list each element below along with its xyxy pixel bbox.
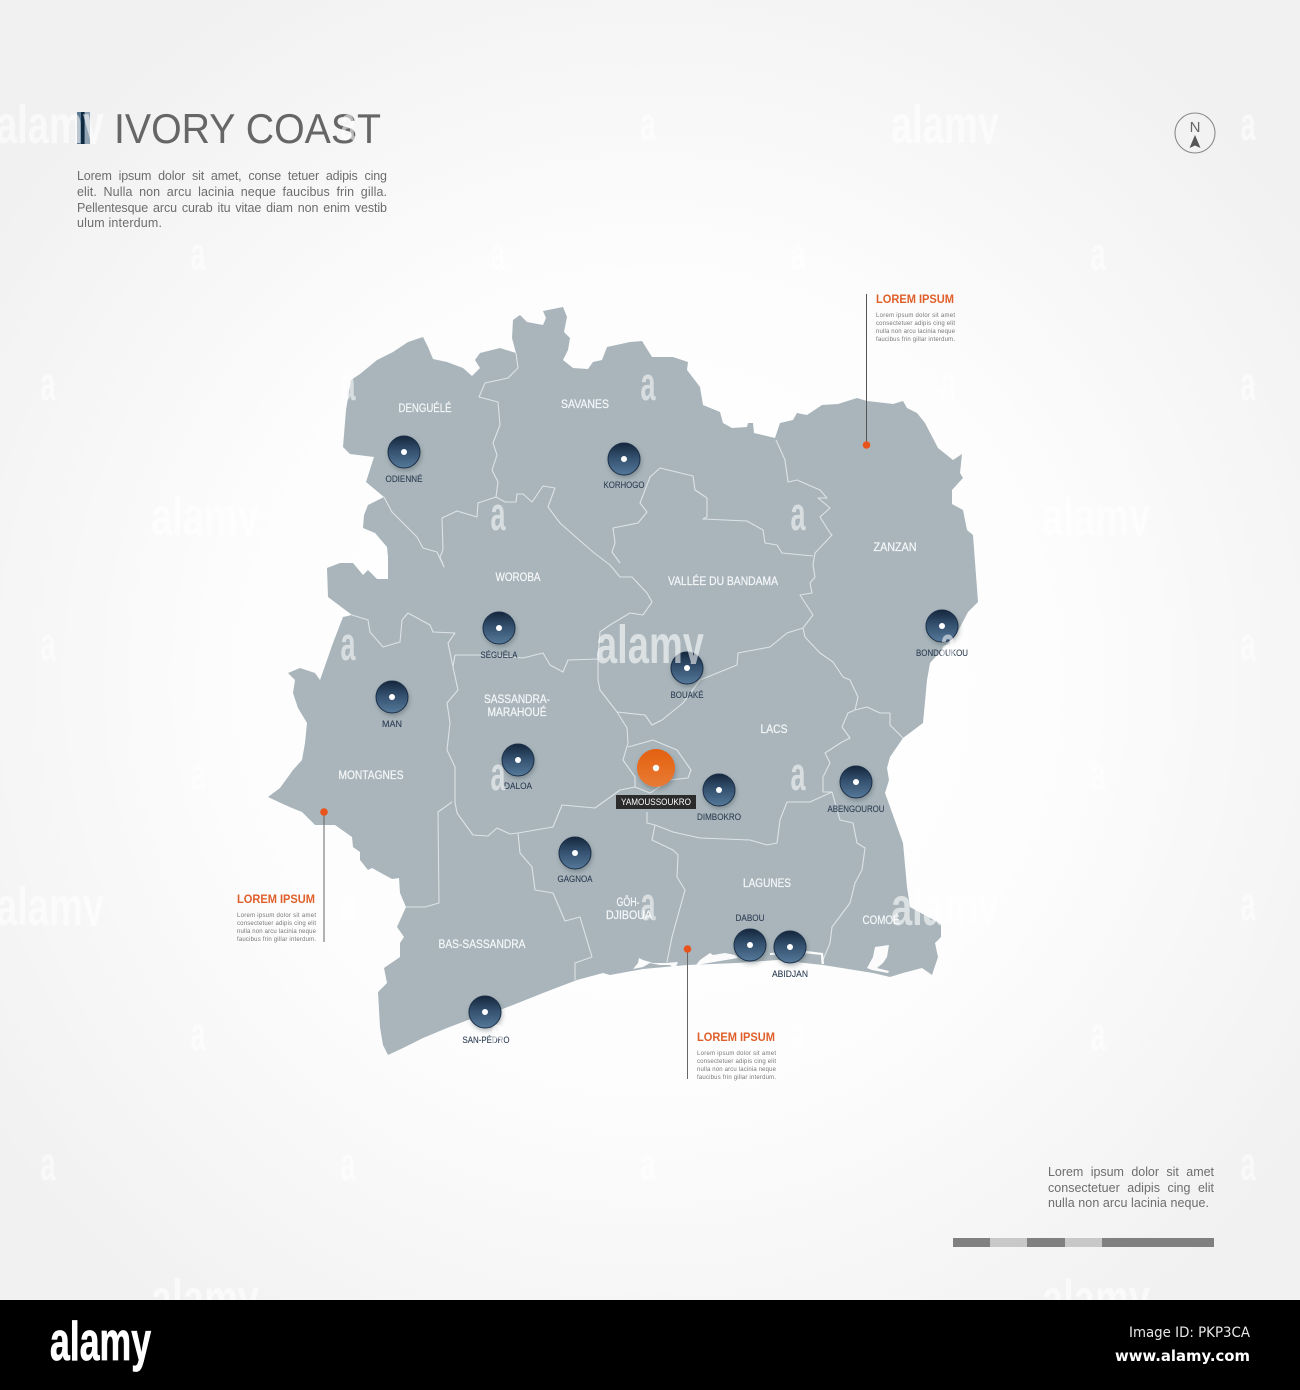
region labels: LACS (760, 724, 788, 736)
pin: Abengourou: ABENGOUROU (828, 804, 884, 814)
watermark pattern: alamy (1042, 1269, 1150, 1329)
region labels: LAGUNES (743, 878, 791, 890)
pin: Daloa: DALOA (504, 781, 532, 791)
pin: Séguéla (480, 612, 518, 660)
region labels (338, 399, 916, 951)
footer bar (0, 1300, 1300, 1390)
coastal lagoons (633, 945, 889, 973)
intro paragraph (77, 169, 387, 230)
pin: Gagnoa (558, 837, 592, 884)
callout: west: LOREM IPSUM (237, 894, 315, 906)
pin: Bouaké: BOUAKÉ (670, 690, 704, 700)
watermark pattern: a (1240, 1137, 1256, 1190)
callout: west: Lorem ipsum dolor sit amet (237, 913, 316, 919)
intro paragraph: Lorem ipsum dolor sit amet, conse tetuer adipis cing (77, 169, 387, 183)
map landmass (268, 307, 978, 1055)
callout: south: consectetuer adipis cing elit (697, 1059, 776, 1065)
map of Ivory Coast (268, 307, 978, 1055)
watermark pattern: a (340, 1137, 356, 1190)
watermark pattern (77, 114, 954, 1043)
region labels: ZANZAN (874, 542, 916, 554)
capital pin: Yamoussoukro (616, 749, 696, 809)
title marker (77, 112, 90, 144)
watermark pattern: a (340, 877, 356, 930)
pin: Dabou (734, 913, 766, 961)
pin: Odienné (386, 436, 422, 484)
watermark pattern: alamy (0, 877, 104, 937)
pin: Bouaké (670, 652, 704, 700)
scale bar (953, 1238, 1214, 1247)
watermark pattern: a (1240, 877, 1256, 930)
watermark pattern: alamy (891, 877, 999, 937)
region labels: SAVANES (561, 399, 609, 411)
website: www.alamy.com (1115, 1347, 1250, 1365)
capital pin: Yamoussoukro: YAMOUSSOUKRO (621, 797, 691, 807)
watermark pattern: a (1240, 97, 1256, 150)
intro paragraph: elit. Nulla non arcu lacinia neque faucibus frin gilla. (77, 185, 387, 199)
region labels: DJIBOUA (606, 910, 652, 922)
pin: Gagnoa: GAGNOA (558, 874, 592, 884)
watermark pattern: a (1090, 227, 1106, 280)
watermark pattern: a (640, 357, 656, 410)
watermark pattern: alamy (596, 615, 704, 675)
watermark pattern: a (190, 1007, 206, 1060)
watermark pattern: alamy (151, 487, 259, 547)
watermark pattern: a (340, 357, 356, 410)
title: IVORY COAST (114, 105, 381, 152)
pin: Man (376, 681, 408, 729)
note text bottom right: nulla non arcu lacinia neque. (1048, 1196, 1209, 1210)
watermark pattern: a (1090, 1007, 1106, 1060)
watermark pattern: a (490, 227, 506, 280)
watermark pattern: a (40, 357, 56, 410)
region labels: VALLÉE DU BANDAMA (668, 575, 778, 588)
pin: Dabou: DABOU (736, 913, 764, 923)
watermark pattern: a (490, 1007, 506, 1060)
intro paragraph: ulum interdum. (77, 216, 162, 230)
watermark pattern: a (940, 357, 956, 410)
watermark pattern: a (40, 1137, 56, 1190)
pin: Séguéla: SÉGUÉLA (480, 650, 518, 660)
callout: west: consectetuer adipis cing elit (237, 921, 316, 927)
pin: Dimbokro (697, 774, 741, 822)
pin: Abengourou (828, 766, 884, 814)
region labels: SASSANDRA- (484, 694, 550, 706)
callout: north: nulla non arcu lacinia neque (876, 329, 956, 335)
pin: Korhogo: KORHOGO (604, 480, 644, 490)
watermark pattern: a (190, 747, 206, 800)
icon: compass north (1175, 113, 1215, 153)
pin: Man: MAN (382, 719, 402, 729)
region labels: MONTAGNES (338, 770, 404, 782)
pin: Odienné: ODIENNÉ (386, 474, 422, 484)
pin: Daloa (502, 744, 534, 791)
city pins (376, 436, 968, 1045)
note text bottom right (1048, 1165, 1215, 1210)
note text bottom right: Lorem ipsum dolor sit amet (1048, 1165, 1215, 1179)
callout: north: Lorem ipsum dolor sit amet (876, 313, 955, 319)
pin: San-Pédro (462, 996, 510, 1045)
pin: Bondoukou: BONDOUKOU (916, 648, 968, 658)
watermark pattern: a (940, 617, 956, 670)
region labels: GÔH- (616, 896, 640, 909)
pin: Dimbokro: DIMBOKRO (697, 812, 741, 822)
callout: west: nulla non arcu lacinia neque (237, 929, 317, 935)
region labels: DENGUÉLÉ (398, 402, 452, 415)
watermark pattern: a (640, 1137, 656, 1190)
watermark pattern: a (490, 747, 506, 800)
icon: compass north: N (1190, 119, 1200, 136)
region labels: MARAHOUÉ (488, 706, 547, 719)
intro paragraph: Pellentesque arcu curab itu vitae diam non enim vestib (77, 201, 387, 215)
region labels: WOROBA (496, 572, 541, 584)
watermark pattern: a (1090, 747, 1106, 800)
pin: Abidjan: ABIDJAN (772, 969, 808, 979)
callout: south: Lorem ipsum dolor sit amet (697, 1051, 776, 1057)
note text bottom right: consectetuer adipis cing elit (1048, 1181, 1215, 1195)
watermark pattern: alamy (0, 95, 104, 155)
watermark pattern: a (190, 227, 206, 280)
pin: Korhogo (604, 443, 644, 490)
callout: north: faucibus frin gillar interdum. (876, 337, 955, 343)
watermark pattern: a (1240, 357, 1256, 410)
region labels: BAS-SASSANDRA (438, 939, 526, 951)
callout: south: faucibus frin gillar interdum. (697, 1075, 776, 1081)
callout: west (237, 808, 328, 943)
pin: San-Pédro: SAN-PÉDRO (462, 1035, 510, 1045)
watermark pattern: a (640, 877, 656, 930)
callout: north: consectetuer adipis cing elit (876, 321, 955, 327)
watermark pattern: a (340, 97, 356, 150)
watermark pattern: a (790, 747, 806, 800)
watermark pattern: a (790, 487, 806, 540)
callout: north: LOREM IPSUM (876, 294, 954, 306)
watermark pattern: alamy (1042, 487, 1150, 547)
callout: west: faucibus frin gillar interdum. (237, 937, 316, 943)
watermark pattern: a (790, 227, 806, 280)
watermark pattern: a (1240, 617, 1256, 670)
watermark pattern: alamy (151, 1269, 259, 1329)
footer logo: alamy (50, 1310, 151, 1372)
watermark pattern: a (340, 617, 356, 670)
watermark pattern: a (40, 617, 56, 670)
image id: Image ID: PKP3CA (1129, 1325, 1250, 1341)
callout: south: nulla non arcu lacinia neque (697, 1067, 777, 1073)
region labels: COMOÉ (862, 914, 900, 927)
callout: south: LOREM IPSUM (697, 1032, 775, 1044)
callout: north (863, 294, 956, 449)
watermark pattern: a (790, 1007, 806, 1060)
watermark pattern: alamy (891, 95, 999, 155)
region borders (352, 353, 903, 980)
callout: south (684, 945, 777, 1081)
pin: Bondoukou (916, 610, 968, 658)
watermark pattern: a (640, 97, 656, 150)
watermark pattern: a (490, 487, 506, 540)
pin: Abidjan (772, 931, 808, 979)
